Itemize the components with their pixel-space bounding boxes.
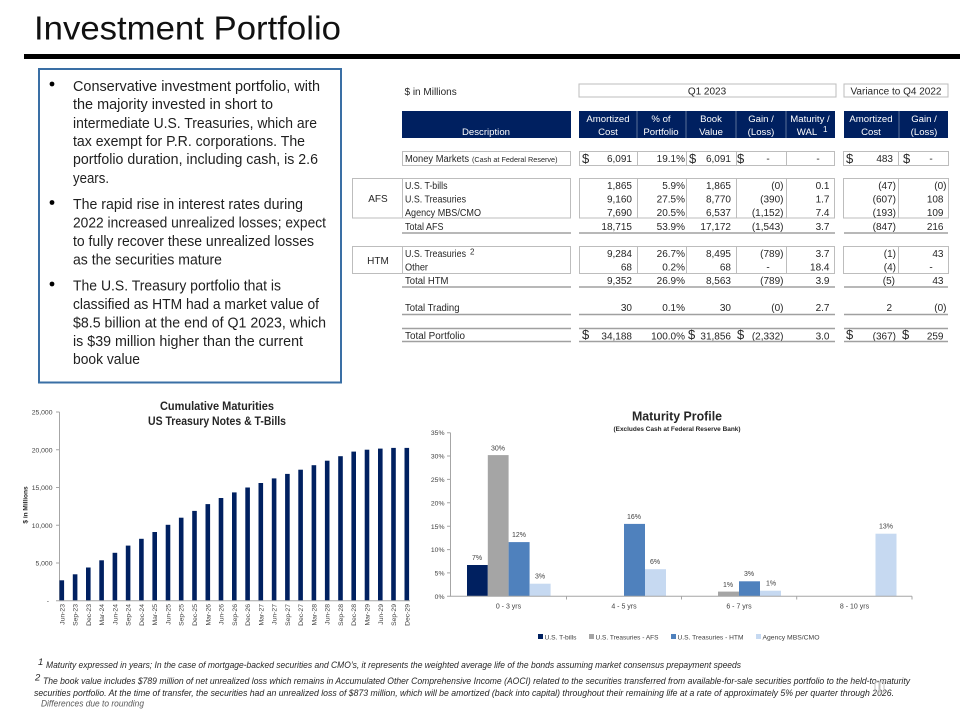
header row: (Loss) <box>748 127 774 138</box>
row: total trading: 30 <box>621 303 632 314</box>
row: money markets: 6,091 <box>706 154 731 165</box>
bullet text: HTM market value: $8.5 billion at the end of Q1 2023, which <box>73 316 326 332</box>
x axis: Sep-28 <box>338 604 345 626</box>
header row: Gain / <box>748 114 774 125</box>
row: money markets: - <box>766 154 770 165</box>
y axis: 25% <box>431 477 444 484</box>
footnote 1: 1 <box>38 657 43 668</box>
HTM block: - <box>929 262 933 274</box>
row: total trading: (0) <box>771 303 784 314</box>
HTM block: U.S. Treasuries <box>405 249 466 260</box>
row: total trading: 30 <box>720 303 731 314</box>
HTM block: (1) <box>884 249 896 260</box>
AFS label box <box>352 178 402 218</box>
panel: key takeaways <box>39 69 341 382</box>
bullet text: HTM market value: classified as HTM had a market value of <box>73 297 320 313</box>
bullet text: HTM market value: The U.S. Treasury portfolio that is <box>73 278 281 294</box>
HTM block: Other <box>405 262 429 274</box>
bars: 8-10 yrs: 13% <box>879 524 893 530</box>
y axis: $ in Millions <box>22 486 30 524</box>
x axis: 8 - 10 yrs <box>840 604 870 610</box>
legend: U.S. Treasuries - AFS <box>596 634 659 642</box>
AFS block: U.S. T-bills <box>405 181 448 192</box>
bullet text: conservative portfolio: Conservative investment portfolio, with <box>73 79 320 95</box>
x axis: Jun-29 <box>378 604 385 625</box>
HTM block: 18.4 <box>810 262 830 274</box>
AFS block: 109 <box>927 208 944 219</box>
y axis <box>431 430 450 601</box>
AFS block: Agency MBS/CMO <box>405 208 481 219</box>
row: total AFS: Total AFS <box>405 222 444 233</box>
AFS block: (607) <box>873 194 896 206</box>
row: total portfolio: $ <box>688 327 696 342</box>
AFS block: 1,865 <box>607 181 632 192</box>
AFS block: (193) <box>873 208 896 219</box>
AFS block: (0) <box>934 181 946 192</box>
y axis: 0% <box>435 594 444 601</box>
rounding note: Differences due to rounding <box>41 698 145 710</box>
row: money markets: - <box>816 154 820 165</box>
HTM block: 0.2% <box>662 262 685 274</box>
y axis <box>22 410 60 605</box>
legend: U.S. Treasuries - HTM <box>678 634 744 642</box>
bars: 6-7 yrs: 3% <box>744 571 754 578</box>
x axis: Dec-26 <box>245 604 252 626</box>
row: money markets: 19.1% <box>657 154 685 165</box>
x axis: Jun-25 <box>166 604 172 625</box>
AFS block: U.S. Treasuries <box>405 194 466 206</box>
row: total HTM: 8,563 <box>706 276 731 287</box>
y axis: 20,000 <box>32 448 53 454</box>
column group header: Q1 2023: Q1 2023 <box>688 86 727 98</box>
y axis: 5% <box>435 570 444 578</box>
x axis <box>450 596 912 610</box>
x axis: Mar-28 <box>311 604 318 626</box>
HTM block: (789) <box>760 249 784 260</box>
row: total trading: Total Trading <box>405 303 460 314</box>
x axis: Dec-27 <box>298 604 305 626</box>
y axis: 10,000 <box>32 523 53 530</box>
AFS block: 5.9% <box>662 181 685 192</box>
row: total AFS: 53.9% <box>657 222 685 233</box>
header row: 1 <box>823 125 828 134</box>
bars: 0-3 yrs: 7% <box>472 555 482 562</box>
y axis: 35% <box>431 430 444 437</box>
AFS block: 9,160 <box>607 194 632 206</box>
row: money markets <box>402 151 948 166</box>
row: total HTM: 3.9 <box>816 276 830 287</box>
bars: 0-3 yrs <box>467 446 551 596</box>
AFS block: (0) <box>771 181 784 192</box>
header row: Amortized <box>849 114 893 125</box>
row: total HTM: 9,352 <box>607 276 632 287</box>
row: total AFS: 18,715 <box>601 222 632 233</box>
chart title <box>148 399 286 428</box>
column group header: Q1 2023 <box>579 84 836 98</box>
bullet text: rising rates: 2022 increased unrealized losses; expect <box>73 216 326 232</box>
AFS block: 20.5% <box>657 208 685 219</box>
bullet text: conservative portfolio <box>50 79 320 187</box>
HTM block: 68 <box>720 262 731 274</box>
bars: 4-5 yrs <box>624 514 666 596</box>
footnote 1: Maturity expressed in years; In the case of mortgage-backed securities and CMO’s, it represents the weighted average life of the bonds assuming market consensus prepayment speeds <box>46 660 741 671</box>
x axis: Jun-24 <box>112 604 119 625</box>
footnote 2: 2 <box>34 672 41 684</box>
AFS label box: AFS <box>368 194 388 205</box>
row: total AFS: 17,172 <box>700 222 731 233</box>
bars: 4-5 yrs: 16% <box>627 514 641 521</box>
chart title: Maturity Profile <box>632 408 722 424</box>
title: Investment Portfolio <box>34 10 341 46</box>
AFS block: 7,690 <box>607 208 632 219</box>
AFS block: 108 <box>927 194 944 206</box>
row: total HTM <box>402 276 948 287</box>
AFS block <box>352 178 948 219</box>
row: money markets: 6,091 <box>607 154 632 165</box>
HTM block: 26.7% <box>657 249 685 260</box>
row: total portfolio: $ <box>582 327 590 342</box>
header row: Description <box>462 127 510 138</box>
y axis: 5,000 <box>35 560 53 568</box>
row: total portfolio: 31,856 <box>700 332 731 342</box>
row: money markets: $ <box>903 151 911 166</box>
row: money markets: $ <box>582 151 590 166</box>
y axis: 15% <box>431 524 444 531</box>
row: total HTM: (5) <box>883 276 895 287</box>
x axis <box>59 601 411 626</box>
bars: 8-10 yrs <box>876 524 896 596</box>
x axis: Jun-26 <box>218 604 226 625</box>
bullet text: conservative portfolio: the majority invested in short to <box>73 97 273 113</box>
header row: WAL <box>797 127 818 138</box>
bars: 0-3 yrs: 30% <box>491 446 505 452</box>
row: total trading: (0) <box>934 303 946 314</box>
AFS block: (47) <box>878 181 896 192</box>
bullet text: rising rates: The rapid rise in interest rates during <box>73 197 303 213</box>
row: total AFS <box>402 222 948 233</box>
row: money markets: $ <box>846 151 854 166</box>
bullet text: rising rates <box>50 197 326 268</box>
x axis: Mar-24 <box>99 604 106 626</box>
x axis: Sep-25 <box>179 604 186 626</box>
AFS block: 27.5% <box>657 194 685 206</box>
units label: $ in Millions <box>404 87 457 98</box>
header row: Book <box>700 114 722 125</box>
HTM block <box>352 246 948 274</box>
x axis: Dec-25 <box>192 604 199 626</box>
HTM block: 9,284 <box>607 249 632 260</box>
HTM block: 68 <box>621 262 632 274</box>
bars: 6-7 yrs <box>718 571 781 596</box>
bars: 6-7 yrs: 1% <box>723 582 733 589</box>
x axis: Mar-27 <box>258 604 265 626</box>
HTM label box <box>352 246 402 274</box>
row: total portfolio: 3.0 <box>816 332 830 342</box>
header row: Amortized <box>586 114 630 125</box>
x axis: Mar-25 <box>152 604 159 626</box>
row: total portfolio: 34,188 <box>601 332 632 342</box>
header row: Cost <box>861 127 881 138</box>
footnotes <box>34 657 911 710</box>
footnote 2: securities portfolio. At the time of transfer, the securities had an unrealized loss of $873 million, which will be amortized (back into capital) throughout their remaining life at a rate of approximately 5% per quarter through 2026. <box>34 688 894 699</box>
row: money markets: $ <box>737 151 745 166</box>
y axis: 25,000 <box>32 410 53 416</box>
legend: U.S. T-bills <box>544 634 577 642</box>
bullet text: HTM market value: is $39 million higher than the current <box>73 334 303 350</box>
bullet text: conservative portfolio: portfolio duration, including cash, is 2.6 <box>73 152 318 168</box>
x axis: Sep-26 <box>232 604 239 626</box>
row: total AFS: 3.7 <box>816 222 830 233</box>
header row: (Loss) <box>911 127 937 138</box>
row: total HTM: 26.9% <box>657 276 685 287</box>
HTM block: 43 <box>932 249 944 260</box>
HTM label box: HTM <box>367 256 389 267</box>
header row: Value <box>699 127 723 138</box>
header row: % of <box>651 114 671 125</box>
y axis: 20% <box>431 500 444 508</box>
y axis: 30% <box>431 454 444 460</box>
row: total portfolio: $ <box>846 327 854 342</box>
x axis: 6 - 7 yrs <box>726 604 752 610</box>
x axis: Dec-24 <box>139 604 146 626</box>
x axis: Mar-29 <box>364 604 372 626</box>
AFS block: 0.1 <box>816 181 830 192</box>
y axis: 15,000 <box>32 485 53 492</box>
row: money markets: (Cash at Federal Reserve) <box>472 155 558 164</box>
row: total trading: 2 <box>886 303 892 314</box>
bullet text: conservative portfolio: intermediate U.S. Treasuries, which are <box>73 116 317 132</box>
chart title: US Treasury Notes & T-Bills <box>148 414 286 428</box>
bullet text: HTM market value: book value <box>73 352 140 368</box>
row: money markets: 483 <box>876 154 893 165</box>
header row: Maturity / <box>790 114 830 125</box>
row: money markets: - <box>929 154 933 165</box>
row: total trading: 0.1% <box>662 303 685 314</box>
y axis: 10% <box>431 547 444 554</box>
x axis: 0 - 3 yrs <box>496 604 522 610</box>
bars: 6-7 yrs: 1% <box>766 580 776 588</box>
bars: 4-5 yrs: 6% <box>650 559 660 566</box>
chart title: Cumulative Maturities <box>160 399 274 413</box>
AFS block: 1,865 <box>706 181 731 192</box>
footnote 2 <box>34 672 911 699</box>
title <box>24 10 960 59</box>
row: total portfolio: $ <box>902 327 910 342</box>
x axis: Dec-23 <box>86 604 93 626</box>
x axis: Jun-23 <box>59 604 66 625</box>
HTM block: 8,495 <box>706 249 731 260</box>
x axis: Sep-24 <box>126 604 133 626</box>
AFS block: 1.7 <box>816 194 830 206</box>
row: total portfolio: (2,332) <box>752 332 784 342</box>
row: total portfolio: $ <box>737 327 745 342</box>
AFS block: 6,537 <box>706 208 731 219</box>
bars: 0-3 yrs: 12% <box>512 532 526 539</box>
chart: cumulative maturities <box>22 399 411 626</box>
row: money markets: Money Markets <box>405 154 469 165</box>
y axis: - <box>47 598 49 605</box>
row: total portfolio <box>402 327 948 342</box>
HTM block: - <box>766 262 770 274</box>
row: total AFS: 216 <box>927 222 944 233</box>
row: total portfolio: Total Portfolio <box>405 331 465 342</box>
x axis: Dec-29 <box>404 604 411 626</box>
row: money markets: $ <box>689 151 697 166</box>
chart title: (Excludes Cash at Federal Reserve Bank) <box>614 426 740 433</box>
x axis: Jun-27 <box>272 604 279 625</box>
row: total AFS: (1,543) <box>752 222 784 233</box>
header row: Gain / <box>911 114 937 125</box>
chart title <box>614 408 740 433</box>
bullet text: conservative portfolio: years. <box>73 171 109 187</box>
row: total trading: 2.7 <box>816 303 830 314</box>
row: total portfolio: (367) <box>873 332 896 342</box>
x axis: Sep-29 <box>391 604 398 626</box>
row: total portfolio: 259 <box>927 332 944 342</box>
row: total HTM: (789) <box>760 276 784 287</box>
legend: Agency MBS/CMO <box>762 634 820 642</box>
bullet text: rising rates: as the securities mature <box>73 252 222 268</box>
legend <box>538 634 820 642</box>
AFS block: (390) <box>760 194 784 206</box>
header row <box>402 111 948 138</box>
bullet text: rising rates: to fully recover these unrealized losses <box>73 234 314 250</box>
row: total portfolio: 100.0% <box>651 332 685 342</box>
row: total trading <box>402 303 948 314</box>
page number placeholder <box>875 682 884 692</box>
header row: Cost <box>598 127 618 138</box>
row: total HTM: 43 <box>932 276 944 287</box>
chart: maturity profile <box>431 408 912 642</box>
HTM block: (4) <box>884 262 896 274</box>
x axis: Jun-28 <box>325 604 332 625</box>
x axis: Dec-28 <box>351 604 358 626</box>
x axis: 4 - 5 yrs <box>611 604 637 610</box>
x axis: Mar-26 <box>205 604 212 626</box>
AFS block: (1,152) <box>752 208 784 219</box>
AFS block: 7.4 <box>816 208 830 219</box>
column group header: variance: Variance to Q4 2022 <box>850 86 942 98</box>
table: investment portfolio <box>352 84 948 342</box>
header row: Portfolio <box>643 127 679 138</box>
row: total HTM: Total HTM <box>405 276 448 287</box>
x axis: Sep-23 <box>73 604 80 626</box>
bullet text: HTM market value <box>50 278 326 368</box>
row: total AFS: (847) <box>873 222 896 233</box>
AFS block: 8,770 <box>706 194 731 206</box>
x axis: Sep-27 <box>285 604 292 626</box>
bullet text: conservative portfolio: tax exempt for P.R. corporations. The <box>73 134 305 150</box>
bars: 0-3 yrs: 3% <box>535 574 545 580</box>
bars <box>60 448 409 601</box>
HTM block: 3.7 <box>816 249 830 260</box>
HTM block: 2 <box>470 248 475 256</box>
